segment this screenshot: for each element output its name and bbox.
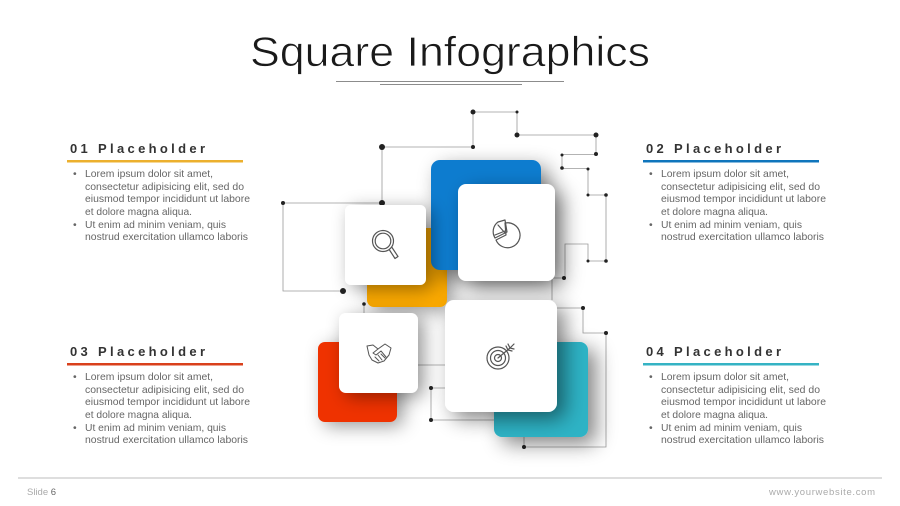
body text 02: nostrud exercitation ullamco laboris xyxy=(661,232,824,243)
heading 01: 01 Placeholder xyxy=(70,141,205,156)
body text 02: et dolore magna aliqua. xyxy=(661,207,768,218)
body text 03: Ut enim ad minim veniam, quis xyxy=(85,423,226,434)
body text 02: • xyxy=(649,169,653,180)
body text 03 xyxy=(73,372,250,446)
body text 01: consectetur adipisicing elit, sed do xyxy=(85,182,244,193)
card: handshake xyxy=(339,313,418,393)
title: Square Infographics xyxy=(250,28,650,75)
body text 03: • xyxy=(73,372,77,383)
body text 02: Ut enim ad minim veniam, quis xyxy=(661,220,802,231)
body text 04: eiusmod tempor incididunt ut labore xyxy=(661,397,826,408)
body text 04 xyxy=(649,372,826,446)
card: search xyxy=(345,205,426,285)
accent bar 02 xyxy=(643,160,819,162)
panel: placeholder 01 xyxy=(67,141,250,243)
body text 02: • xyxy=(649,220,653,231)
heading 04: 04 Placeholder xyxy=(646,344,781,359)
square: teal xyxy=(494,342,588,437)
icon: magnifier xyxy=(372,230,398,258)
icon: target xyxy=(487,344,514,369)
body text 01: Ut enim ad minim veniam, quis xyxy=(85,220,226,231)
body text 03: • xyxy=(73,423,77,434)
body text 02: consectetur adipisicing elit, sed do xyxy=(661,182,820,193)
square: yellow xyxy=(367,228,447,307)
icon: pie chart xyxy=(493,220,520,248)
body text 01: nostrud exercitation ullamco laboris xyxy=(85,232,248,243)
accent bar 01 xyxy=(67,160,243,162)
body text 03: consectetur adipisicing elit, sed do xyxy=(85,385,244,396)
body text 04: nostrud exercitation ullamco laboris xyxy=(661,435,824,446)
heading 02: 02 Placeholder xyxy=(646,141,781,156)
body text 03: et dolore magna aliqua. xyxy=(85,410,192,421)
footer: website: www.yourwebsite.com xyxy=(768,487,875,498)
footer rule xyxy=(18,478,882,479)
body text 01: • xyxy=(73,169,77,180)
body text 01: • xyxy=(73,220,77,231)
body text 04: • xyxy=(649,423,653,434)
panel: placeholder 04 xyxy=(643,344,826,446)
body text 03: nostrud exercitation ullamco laboris xyxy=(85,435,248,446)
title underline xyxy=(336,81,564,85)
heading 03: 03 Placeholder xyxy=(70,344,205,359)
body text 03: Lorem ipsum dolor sit amet, xyxy=(85,372,213,383)
accent bar 03 xyxy=(67,363,243,366)
body text 01: et dolore magna aliqua. xyxy=(85,207,192,218)
square: red xyxy=(318,342,397,422)
body text 02: Lorem ipsum dolor sit amet, xyxy=(661,169,789,180)
body text 01 xyxy=(73,169,250,243)
body text 02 xyxy=(649,169,826,243)
circuit lines xyxy=(281,110,608,449)
body text 04: • xyxy=(649,372,653,383)
body text 02: eiusmod tempor incididunt ut labore xyxy=(661,194,826,205)
body text 04: consectetur adipisicing elit, sed do xyxy=(661,385,820,396)
icon: handshake xyxy=(367,344,391,363)
footer: slide number: Slide 6 xyxy=(27,487,56,498)
body text 01: Lorem ipsum dolor sit amet, xyxy=(85,169,213,180)
body text 01: eiusmod tempor incididunt ut labore xyxy=(85,194,250,205)
body text 03: eiusmod tempor incididunt ut labore xyxy=(85,397,250,408)
card: target xyxy=(445,300,557,412)
body text 04: Ut enim ad minim veniam, quis xyxy=(661,423,802,434)
body text 04: Lorem ipsum dolor sit amet, xyxy=(661,372,789,383)
accent bar 04 xyxy=(643,363,819,366)
panel: placeholder 02 xyxy=(643,141,826,243)
panel: placeholder 03 xyxy=(67,344,250,446)
square: blue xyxy=(431,160,541,270)
body text 04: et dolore magna aliqua. xyxy=(661,410,768,421)
card: pie chart xyxy=(458,184,555,281)
